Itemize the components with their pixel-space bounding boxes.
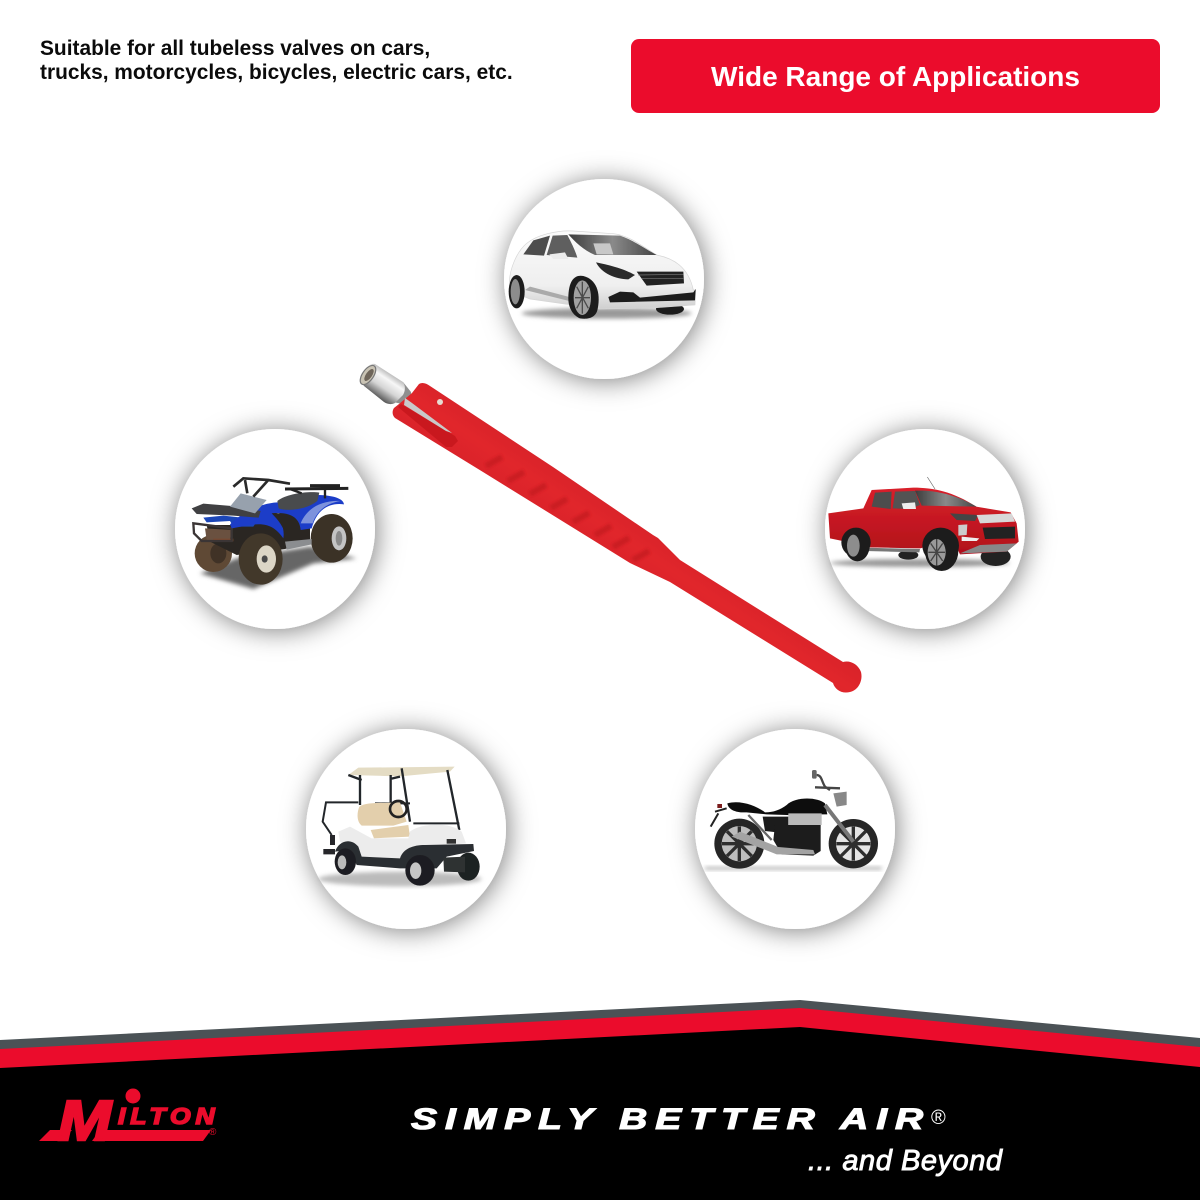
circle: motorcycle — [695, 729, 895, 929]
tagline: and beyond: ... and Beyond — [808, 1145, 1003, 1177]
tagline: simply better air: SIMPLY BETTER AIR — [411, 1103, 923, 1136]
circle: golf cart — [306, 729, 506, 929]
intro text: trucks, motorcycles, bicycles, electric cars, etc. — [40, 61, 513, 84]
heading banner: Wide Range of Applications — [711, 61, 1080, 92]
Milton logo: ILTON — [118, 1105, 216, 1130]
tyre tool: red valve tool — [357, 363, 862, 693]
circle: red pickup truck — [825, 429, 1025, 629]
intro text: Suitable for all tubeless valves on cars, — [40, 37, 430, 60]
Milton logo: ® — [209, 1127, 217, 1138]
tagline: simply better air: ® — [931, 1107, 946, 1129]
pocket clip slot — [398, 404, 458, 447]
clip rivet — [437, 399, 443, 405]
intro text — [40, 37, 513, 84]
Milton logo — [39, 1088, 217, 1152]
heading banner — [631, 39, 1160, 113]
Milton logo: M — [58, 1088, 113, 1152]
grip ribs — [486, 457, 649, 560]
circle: white car — [504, 179, 704, 379]
metal clip — [404, 398, 452, 433]
pen body — [393, 383, 862, 693]
chrome ferrule — [357, 363, 412, 406]
footer band — [0, 1000, 1200, 1200]
circle: blue ATV — [175, 429, 375, 629]
